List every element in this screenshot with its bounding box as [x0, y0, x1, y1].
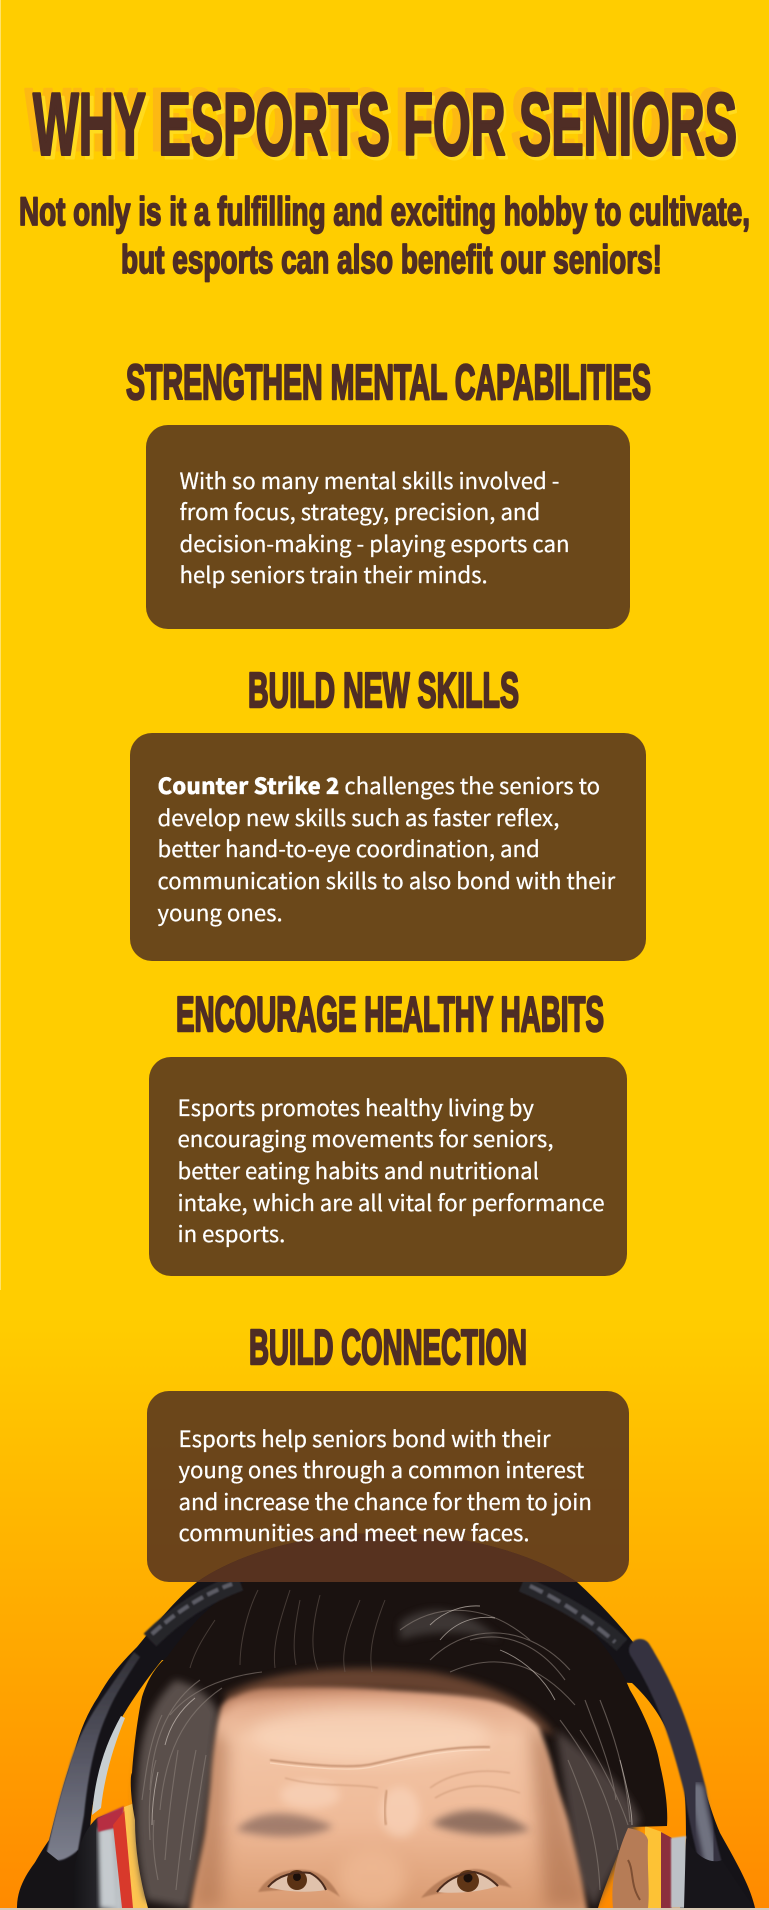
panel: build connection: young ones through a common interest	[178, 1453, 585, 1485]
panel: strengthen mental capabilities	[146, 425, 630, 629]
heading: build connection: BUILD CONNECTION	[249, 1321, 527, 1375]
forehead wrinkles	[270, 1747, 520, 1825]
hair	[130, 1582, 668, 1908]
panel: strengthen mental capabilities: With so many mental skills involved -	[180, 464, 559, 496]
left eyebrow	[236, 1814, 333, 1836]
left ear cup	[17, 1802, 148, 1908]
right eye	[421, 1869, 512, 1898]
panel: build connection: communities and meet new faces.	[178, 1516, 530, 1548]
right eyebrow	[431, 1810, 530, 1835]
left eye	[258, 1870, 340, 1897]
panel: encourage healthy habits: encouraging movements for seniors,	[178, 1122, 554, 1154]
panel: encourage healthy habits: better eating habits and nutritional	[178, 1154, 539, 1186]
panel: strengthen mental capabilities: help seniors train their minds.	[180, 558, 488, 590]
right ear	[612, 1828, 649, 1908]
panel: strengthen mental capabilities: decision-making - playing esports can	[180, 527, 570, 559]
panel: encourage healthy habits	[149, 1057, 627, 1276]
subtitle	[19, 190, 750, 282]
panel: encourage healthy habits: intake, which are all vital for performance	[178, 1186, 605, 1218]
photo: senior man wearing headset	[17, 1533, 755, 1910]
headset band top segments	[150, 1582, 622, 1645]
panel: build new skills: develop new skills such as faster reflex,	[158, 801, 559, 833]
panel: strengthen mental capabilities: from focus, strategy, precision, and	[180, 495, 540, 527]
panel: build new skills: Counter Strike 2 challenges the seniors to	[158, 769, 600, 801]
panel: build new skills: young ones.	[158, 896, 283, 928]
panel: build connection: Esports help seniors bond with their	[178, 1422, 551, 1454]
panel: build connection: and increase the chance for them to join	[178, 1485, 592, 1517]
bottom edge line	[0, 1908, 769, 1910]
headset band	[17, 1533, 755, 1908]
panel: encourage healthy habits: in esports.	[178, 1217, 285, 1249]
panel: encourage healthy habits: Esports promotes healthy living by	[178, 1091, 534, 1123]
panel: build new skills	[130, 733, 646, 961]
panel: build new skills: better hand-to-eye coordination, and	[158, 832, 540, 864]
right ear cup	[645, 1826, 755, 1908]
face	[180, 1680, 600, 1910]
head showing through panel	[197, 1533, 577, 1582]
heading: build new skills: BUILD NEW SKILLS	[248, 664, 519, 718]
panel: build connection	[147, 1391, 629, 1582]
panel: build new skills: communication skills to also bond with their	[158, 864, 616, 896]
